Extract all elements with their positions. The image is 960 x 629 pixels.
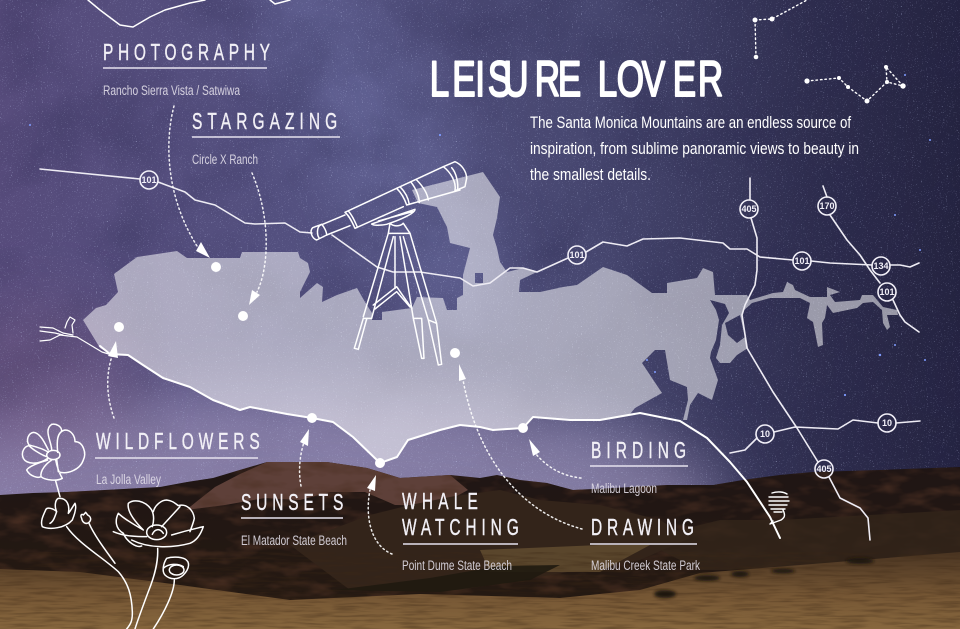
label: birding (590, 438, 688, 496)
label: birding: BIRDING (591, 438, 686, 464)
icon: telescope (311, 162, 467, 365)
label: photography: Rancho Sierra Vista / Satwiwa (103, 83, 240, 98)
label: wildflowers: La Jolla Valley (96, 472, 161, 487)
arrow: wildflowers (108, 341, 118, 418)
marker: stargazing (238, 311, 248, 321)
icon: wildflowers (22, 424, 203, 629)
label: stargazing: Circle X Ranch (192, 152, 258, 167)
intro paragraph: inspiration, from sublime panoramic views to beauty in (530, 140, 859, 158)
arrow: whale watching (367, 475, 392, 554)
intro paragraph: the smallest details. (530, 166, 651, 184)
shield 10 east: 10 (760, 429, 770, 439)
highway 10 (730, 420, 920, 453)
shield 101 west: 101 (141, 175, 157, 185)
shield 101 east: 101 (794, 256, 810, 266)
intro paragraph (530, 114, 859, 184)
label: wildflowers (95, 429, 260, 487)
shield 101 center (568, 246, 586, 264)
shield 10 east (756, 425, 774, 443)
flower: small left (42, 498, 76, 528)
label: whale watching: WATCHING (402, 515, 519, 541)
label: stargazing: STARGAZING (192, 109, 337, 135)
label: sunsets (241, 490, 347, 548)
map: Santa Monica Mountains land shape (83, 172, 898, 463)
highway 170 (823, 186, 919, 332)
label: whale watching: WHALE (402, 489, 478, 515)
highway network (40, 169, 920, 540)
marker: drawing (450, 348, 460, 358)
decorative outline at top edge (88, 0, 290, 27)
marker: photography (211, 262, 221, 272)
icon: surfer at Point Mugu (40, 317, 112, 355)
arrow: drawing (459, 364, 582, 529)
map: coastline (100, 346, 780, 538)
marker: birding (518, 423, 528, 433)
label: whale watching: Point Dume State Beach (402, 558, 512, 573)
shield 405 north (740, 200, 758, 218)
red cliff ridge (186, 462, 468, 510)
intro paragraph: The Santa Monica Mountains are an endless source of (530, 114, 851, 132)
shield 405 north: 405 (741, 204, 757, 214)
shield 101 west (140, 171, 158, 189)
shield 134: 134 (873, 261, 889, 271)
shield 170 (818, 197, 836, 215)
arrow: stargazing (249, 173, 266, 305)
label: sunsets: El Matador State Beach (241, 533, 347, 548)
marker: whale watching (375, 458, 385, 468)
arrow: sunsets (300, 429, 309, 486)
shield 101 south (878, 283, 896, 301)
title: LEISURE LOVER (430, 52, 723, 108)
shield 101 south: 101 (879, 287, 895, 297)
label: drawing: DRAWING (591, 515, 694, 541)
shield 10 far east: 10 (882, 418, 892, 428)
shield 101 east (793, 252, 811, 270)
shield 405 south: 405 (816, 464, 832, 474)
flower: poppy bud (163, 557, 189, 579)
label: photography: PHOTOGRAPHY (103, 40, 270, 66)
shield 405 south (815, 460, 833, 478)
label: birding: Malibu Lagoon (591, 481, 657, 496)
flower: bud (81, 512, 91, 523)
label: whale watching (402, 489, 519, 573)
location markers and dotted arrows (108, 106, 582, 554)
constellations (752, 0, 906, 104)
icon: hand-drawn hand (769, 492, 789, 524)
label: photography (103, 40, 270, 98)
arrow: birding (529, 439, 581, 478)
flower: stems (67, 523, 174, 629)
ground base (0, 462, 960, 629)
label: drawing: Malibu Creek State Park (591, 558, 700, 573)
shield 134 (872, 257, 890, 275)
marker: sunsets (307, 413, 317, 423)
label: drawing (590, 515, 700, 573)
label: sunsets: SUNSETS (241, 490, 343, 516)
highway 405 (742, 178, 870, 540)
arrow: photography (169, 106, 210, 258)
marker: wildflowers (114, 322, 124, 332)
highway 101 (40, 169, 919, 286)
flower: large cosmos (113, 500, 203, 547)
shield 101 center: 101 (569, 250, 585, 260)
label: stargazing (192, 109, 340, 167)
shield 170: 170 (819, 201, 835, 211)
shield 10 far east (878, 414, 896, 432)
flower: large top (22, 424, 85, 480)
label: wildflowers: WILDFLOWERS (96, 429, 260, 455)
